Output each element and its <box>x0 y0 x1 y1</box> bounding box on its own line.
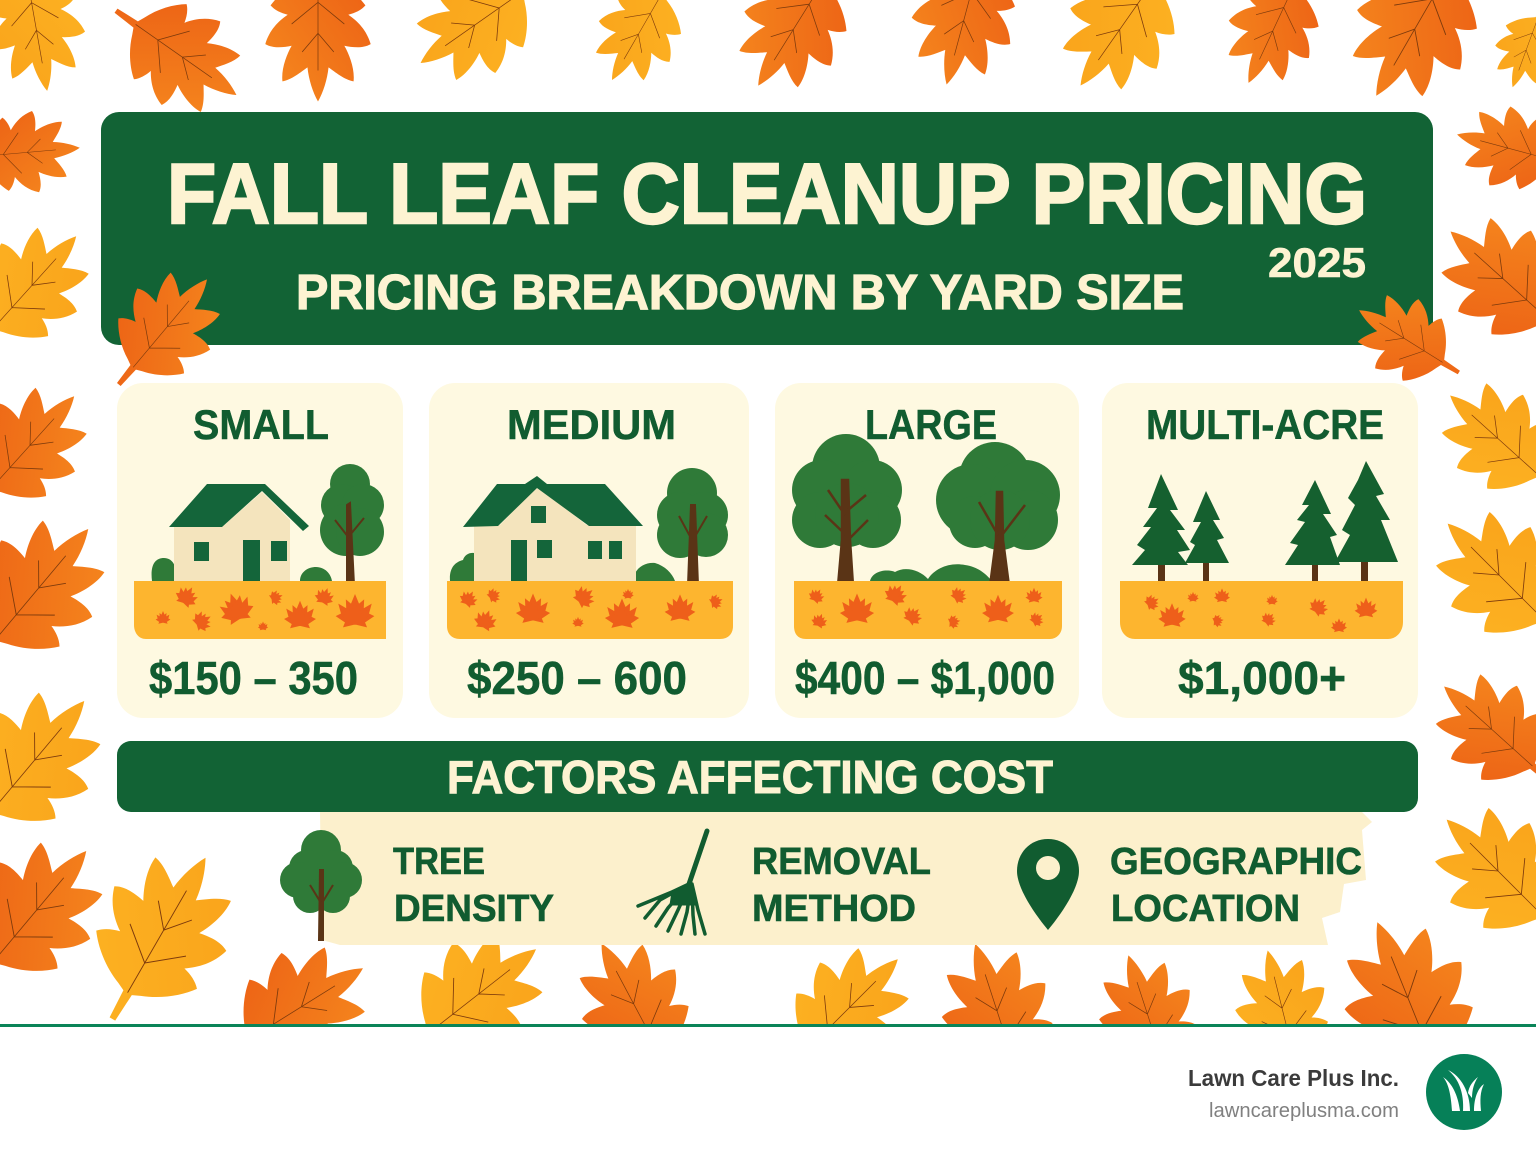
price: medium: $250 – 600 <box>467 652 687 704</box>
banner leaf left <box>82 249 243 415</box>
year: 2025 <box>1268 239 1366 286</box>
footer brand text <box>1188 1065 1399 1122</box>
factor: removal method <box>752 841 931 930</box>
title: FALL LEAF CLEANUP PRICING <box>167 147 1367 242</box>
factor: removal method: REMOVAL <box>752 841 931 883</box>
illustration: large trees <box>792 434 1062 639</box>
card: large <box>775 383 1079 718</box>
icon: tree <box>280 830 362 940</box>
heading: medium: MEDIUM <box>507 401 676 448</box>
price: large: $400 – $1,000 <box>795 652 1055 704</box>
heading: multi-acre: MULTI-ACRE <box>1146 401 1384 448</box>
factors heading: FACTORS AFFECTING COST <box>447 751 1053 803</box>
title banner <box>101 112 1433 345</box>
subtitle: PRICING BREAKDOWN BY YARD SIZE <box>296 266 1184 320</box>
factor: removal method: METHOD <box>752 888 916 930</box>
logo <box>1426 1054 1502 1130</box>
footer brand text: Lawn Care Plus Inc. <box>1188 1065 1399 1091</box>
heading: small: SMALL <box>193 401 329 448</box>
factors banner <box>117 741 1418 812</box>
factor: tree density <box>393 841 554 930</box>
illustration: small house <box>134 464 386 639</box>
factor: geographic location: LOCATION <box>1111 888 1300 930</box>
factors panel <box>320 812 1372 945</box>
footer brand text: lawncareplusma.com <box>1209 1100 1399 1122</box>
icon: rake <box>638 831 707 934</box>
illustration: medium house <box>447 468 733 639</box>
banner leaf right <box>1337 276 1480 407</box>
icon: location pin <box>1017 839 1079 930</box>
card: multi-acre <box>1102 383 1418 718</box>
factor: geographic location: GEOGRAPHIC <box>1110 841 1362 883</box>
illustration: pine trees <box>1120 461 1403 639</box>
factor: geographic location <box>1110 841 1362 930</box>
price: small: $150 – 350 <box>149 652 358 704</box>
footer rule <box>0 1024 1536 1027</box>
factor: tree density: TREE <box>393 841 485 883</box>
card: small <box>117 383 403 718</box>
factor: tree density: DENSITY <box>394 888 554 930</box>
price: multi-acre: $1,000+ <box>1178 652 1346 704</box>
heading: large: LARGE <box>865 401 997 448</box>
card: medium <box>429 383 749 718</box>
